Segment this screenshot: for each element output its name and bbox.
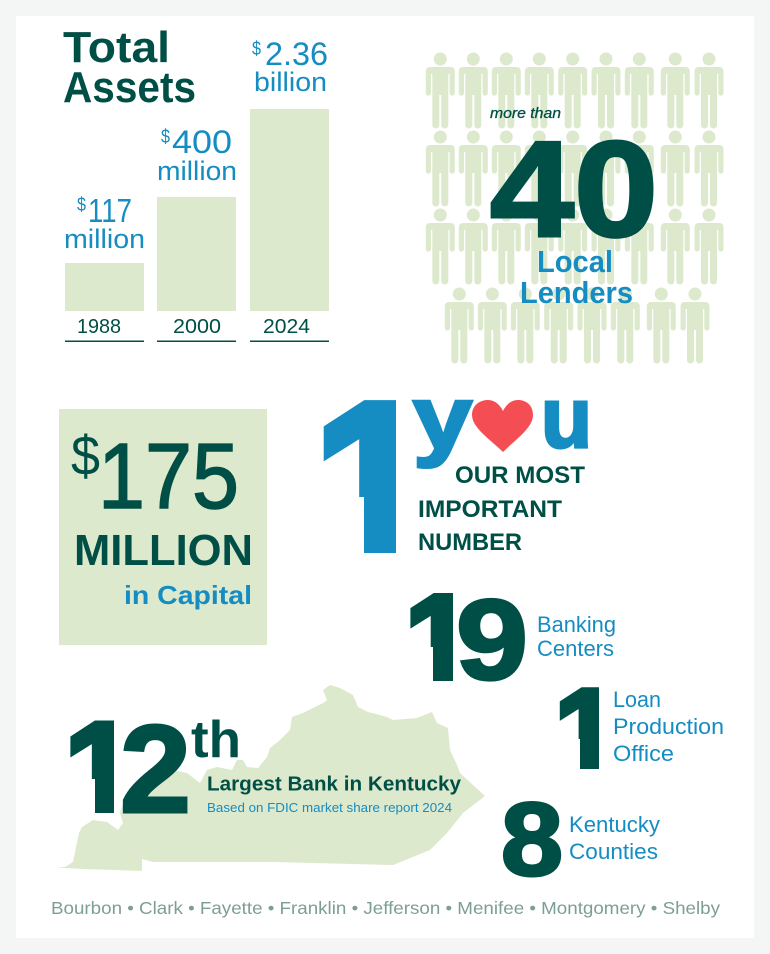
stat: loan production office: Loan	[613, 687, 661, 712]
stat: banking centers: Banking	[537, 612, 616, 637]
local lenders text: Local	[537, 244, 613, 279]
bar chart: total assets	[64, 36, 329, 342]
local lenders text: Lenders	[520, 275, 633, 310]
rank: 12th	[70, 720, 461, 814]
bar 2000: 400	[172, 124, 232, 160]
panel: capital: $	[71, 424, 100, 487]
local lenders text	[490, 105, 658, 310]
stat: kentucky counties: Counties	[569, 839, 658, 864]
local lenders text: more than	[490, 105, 561, 122]
rank: 12th: 1	[64, 695, 137, 841]
bar 1988: 1988	[77, 316, 121, 338]
rank: 12th: 2	[120, 701, 191, 839]
bar 1988: million	[64, 224, 145, 254]
bar 2024	[250, 36, 329, 342]
stat: loan production office: Office	[613, 741, 674, 766]
stat: banking centers	[410, 593, 615, 682]
bar 2024: billion	[254, 67, 327, 97]
one you: NUMBER	[418, 529, 522, 556]
title: Total	[63, 23, 170, 72]
bar 2000	[157, 124, 237, 342]
icon grid: people	[426, 52, 724, 364]
stat: loan production office	[560, 687, 723, 769]
one you: y	[413, 369, 472, 469]
bar 2000: million	[157, 156, 237, 186]
bar 1988: 117	[88, 192, 132, 229]
rank: 12th: Based on FDIC market share report 2024	[207, 800, 452, 815]
map: kentucky	[56, 685, 485, 871]
title: Assets	[63, 63, 196, 112]
one you: u	[541, 371, 592, 466]
bar 1988	[64, 192, 145, 342]
stat: loan production office: Production	[613, 714, 724, 739]
one you: OUR MOST	[455, 462, 585, 489]
stat: banking centers: 1	[405, 571, 473, 708]
bar 2024: $	[252, 39, 261, 60]
stat: kentucky counties: Kentucky	[569, 812, 660, 837]
stat: banking centers: 9	[456, 577, 528, 704]
bar 1988: $	[77, 195, 86, 216]
title	[63, 23, 196, 112]
bar 2000: $	[161, 127, 170, 148]
stat: kentucky counties	[501, 782, 660, 898]
bar 2024: 2.36	[265, 36, 328, 72]
rank: 12th: th	[191, 711, 241, 769]
bar 2000: 2000	[173, 316, 221, 338]
icon: heart	[472, 400, 533, 452]
bar 2024: 2024	[263, 316, 310, 338]
panel: capital: 175	[98, 424, 239, 528]
county list: Bourbon • Clark • Fayette • Franklin • Jefferson • Menifee • Montgomery • Shelby	[51, 898, 720, 918]
panel: capital: MILLION	[74, 526, 253, 575]
stat: banking centers: Centers	[537, 636, 614, 661]
panel: capital	[59, 409, 267, 645]
one you	[324, 400, 588, 553]
stat: kentucky counties: 8	[501, 782, 563, 898]
rank: 12th: Largest Bank in Kentucky	[207, 774, 462, 796]
one you: 1	[314, 358, 434, 599]
local lenders text: 40	[490, 113, 658, 265]
stat: loan production office: 1	[555, 667, 618, 794]
one you: IMPORTANT	[418, 496, 562, 523]
panel: capital: in Capital	[124, 580, 252, 610]
